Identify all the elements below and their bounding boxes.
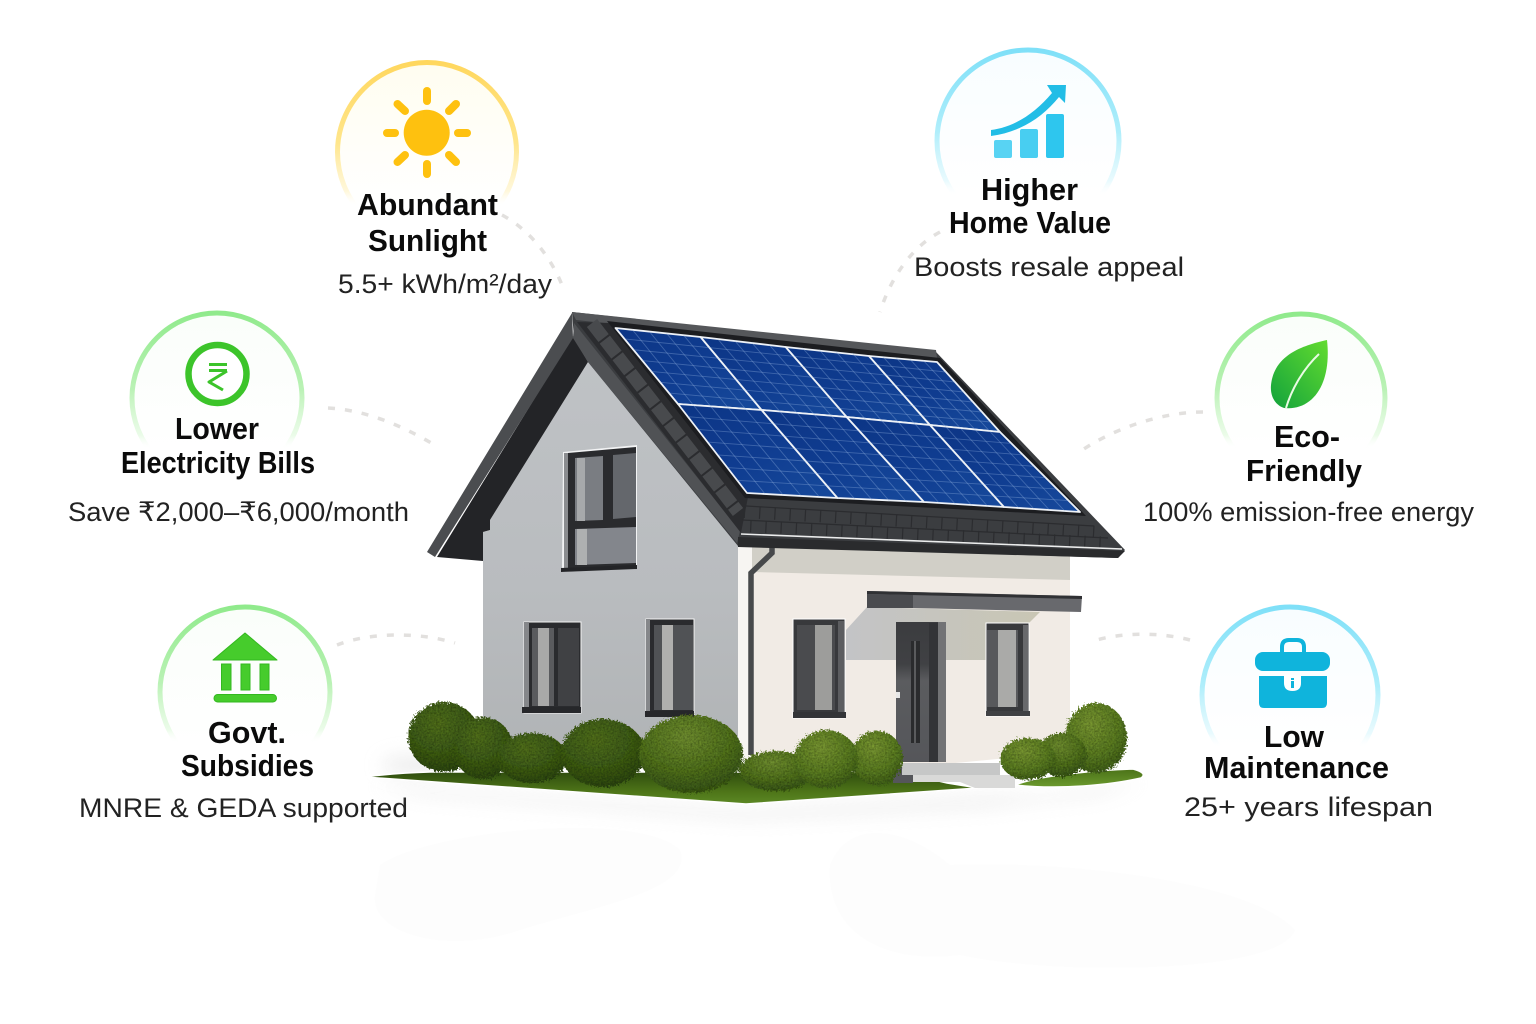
lower roof tiles: [742, 506, 1114, 543]
heading: eco-friendly: Eco-: [1274, 419, 1340, 454]
shadow behind left bushes: [381, 755, 449, 775]
shrubs by the door: [794, 730, 903, 788]
shrubs left of the house: [408, 702, 813, 793]
solar panels: [616, 328, 1080, 512]
icon: rupee coin: [188, 345, 246, 403]
ring: maintenance: [1202, 607, 1378, 783]
text: monthly saving: Save ₹2,000–₹6,000/month: [68, 497, 409, 527]
panel: lower electricity bills: [68, 313, 409, 527]
lower window three: [793, 619, 846, 718]
grey gable wall: [483, 362, 738, 770]
ring: eco: [1217, 314, 1385, 482]
heading: govt subsidies: Subsidies: [181, 748, 314, 783]
dashed connector: maintenance to house: [1090, 634, 1190, 642]
heading: abundant sunlight: Sunlight: [368, 223, 487, 258]
ring: bills: [132, 313, 302, 483]
roof edge and gutter: [738, 534, 1125, 558]
text: sunlight value: 5.5+ kWh/m²/day: [338, 269, 553, 299]
dashed connector: subsidies to house: [337, 635, 455, 645]
faint ground reflection blobs: [375, 828, 1295, 968]
side roof tiles: [577, 322, 748, 533]
shrubs right of the house: [1000, 703, 1127, 780]
cream wall: [738, 545, 1070, 770]
dashed connector: home value to house: [880, 232, 940, 312]
panel: higher home value: [914, 50, 1184, 282]
gable fascia left: [427, 313, 573, 557]
dashed connector: bills to house: [328, 408, 438, 447]
icon: leaf: [1271, 340, 1328, 408]
wall shadows: [738, 542, 1070, 770]
heading: abundant sunlight: Abundant: [357, 187, 498, 222]
ring: subsidies: [160, 607, 330, 777]
underside of left gable: [437, 336, 588, 561]
icon: briefcase: [1255, 640, 1330, 708]
canopy: [867, 591, 1082, 612]
panel: abundant sunlight: [338, 62, 553, 299]
panel: govt subsidies: [79, 607, 408, 823]
lower window two: [645, 619, 694, 717]
heading: govt subsidies: Govt.: [208, 715, 286, 750]
heading: eco-friendly: Friendly: [1246, 453, 1363, 488]
roof slope: [572, 312, 1125, 558]
text: resale appeal: Boosts resale appeal: [914, 252, 1184, 282]
lower window one: [522, 622, 581, 713]
heading: low maintenance: Low: [1264, 719, 1325, 754]
heading: higher home value: Home Value: [949, 205, 1111, 240]
drainpipe: [751, 538, 772, 755]
solar cell grid: [624, 330, 1069, 511]
icon: sun: [387, 91, 467, 174]
steps: [893, 763, 1015, 788]
text: supporting agencies: MNRE & GEDA supported: [79, 793, 408, 823]
lawn: [365, 769, 1143, 804]
door: [896, 622, 946, 762]
dashed connector: eco to house: [1078, 412, 1203, 453]
heading: lower electricity bills: Electricity Bills: [121, 445, 315, 480]
panel: eco-friendly: [1143, 314, 1474, 527]
upper window: [561, 445, 637, 572]
gable fascia right: [573, 323, 740, 543]
heading: low maintenance: Maintenance: [1204, 750, 1389, 785]
text: lifespan: 25+ years lifespan: [1184, 792, 1433, 822]
icon: growth chart: [991, 85, 1066, 158]
ring: sunlight: [338, 62, 516, 242]
house illustration: [365, 312, 1145, 820]
ring: home value: [937, 50, 1119, 232]
ground shadow: [370, 782, 1145, 820]
text: emission free: 100% emission-free energy: [1143, 497, 1474, 527]
heading: lower electricity bills: Lower: [175, 411, 259, 446]
heading: higher home value: Higher: [981, 172, 1078, 207]
lower window four: [986, 623, 1030, 716]
dashed connector: sunlight to house: [502, 215, 564, 290]
ridge cap: [572, 312, 937, 358]
solar array backing: [607, 321, 1086, 516]
icon: government building: [213, 633, 277, 702]
panel: low maintenance: [1184, 607, 1433, 822]
